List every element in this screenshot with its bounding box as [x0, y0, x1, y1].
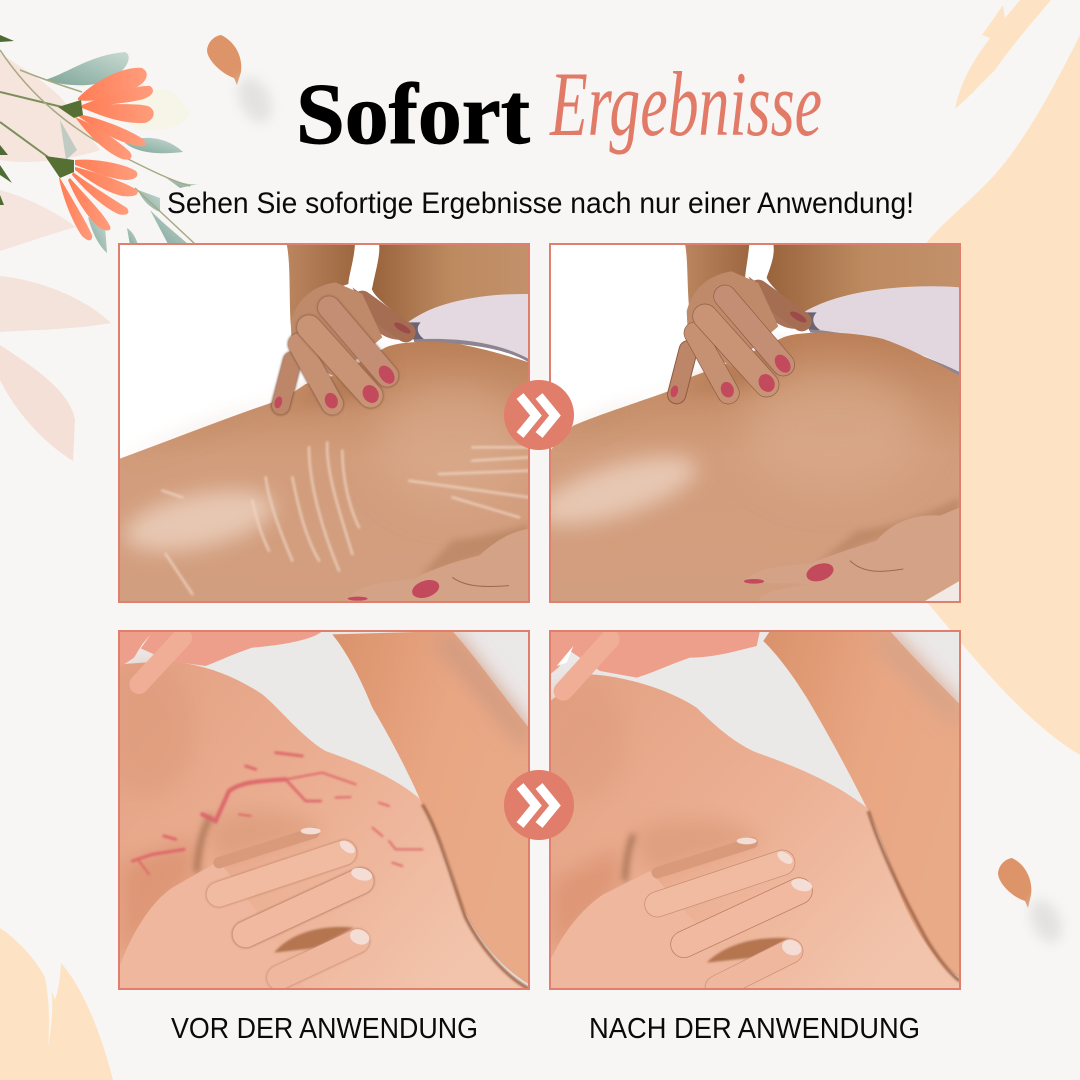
fingers: [657, 843, 799, 988]
title: [296, 53, 822, 162]
panel: after, arm: [533, 631, 960, 989]
arm shading: [422, 631, 529, 989]
lower hand: [348, 529, 529, 602]
nails: [737, 838, 814, 958]
white bud flower: [130, 89, 190, 130]
background shape: right peach blob: [925, 35, 1080, 755]
red stretch marks: [132, 753, 422, 874]
torso: [767, 244, 960, 312]
arrow: top row: [504, 380, 574, 450]
lower orange flower: [59, 160, 138, 240]
fold shadow: [625, 834, 633, 881]
panel border: [119, 244, 529, 602]
falling leaf right: [998, 858, 1068, 948]
arm shading: [868, 631, 960, 981]
nails: [273, 320, 412, 410]
nails: [669, 309, 808, 399]
nails: [301, 828, 374, 947]
stems: [0, 50, 195, 244]
lower hand: [744, 507, 960, 602]
underwear: [406, 294, 529, 362]
underwear: [800, 286, 960, 376]
arm top hand: [550, 631, 760, 691]
upper hand: [273, 282, 412, 410]
label: before: VOR DER ANWENDUNG: [171, 1013, 478, 1045]
fingers: [219, 833, 361, 978]
fingers: [677, 296, 783, 395]
title: Ergebnisse: [549, 53, 822, 155]
thigh shading: [530, 344, 960, 564]
forearm: [287, 244, 355, 324]
decorative light stroke in bottom left splash: [26, 920, 52, 1046]
fingers: [281, 307, 387, 406]
body shading: [533, 681, 763, 961]
forearm: [685, 245, 750, 305]
floral decoration: [0, 35, 198, 461]
body shading: [102, 664, 326, 964]
background shape: bottom left peach splash: [0, 928, 113, 1080]
thigh shading: [118, 354, 529, 577]
top orange flower: [75, 68, 154, 160]
gap below hand: [274, 927, 354, 953]
arrow: bottom row: [504, 770, 574, 840]
main hand: [550, 838, 814, 989]
arm: [332, 631, 529, 984]
panel border: [550, 631, 960, 989]
thigh: [119, 342, 529, 602]
arm top hand: [119, 631, 322, 684]
label: after: NACH DER ANWENDUNG: [589, 1013, 920, 1045]
panel border: [550, 244, 960, 602]
subtitle: Sehen Sie sofortige Ergebnisse nach nur einer Anwendung!: [167, 187, 914, 220]
upper hand: [669, 271, 808, 399]
main hand: [119, 828, 374, 989]
arm: [763, 631, 960, 978]
falling leaf top: [207, 35, 279, 128]
panel: after, thigh: [530, 244, 960, 602]
pale petals: [0, 53, 111, 461]
torso: [372, 244, 529, 322]
panel border: [119, 631, 529, 989]
torso: [550, 674, 960, 989]
thigh: [550, 333, 960, 602]
leaves: [0, 35, 198, 253]
top flower calyx: [58, 100, 83, 118]
title: Sofort: [296, 65, 530, 162]
torso: [119, 661, 529, 989]
fold shadow: [197, 816, 211, 873]
panel: before, arm: [102, 631, 529, 989]
lower flower calyx: [45, 156, 74, 178]
gap below hand: [707, 938, 790, 963]
background shape: top right peach splash: [955, 0, 1051, 109]
stretch marks: [162, 442, 529, 594]
panel: before, thigh: [118, 244, 529, 602]
